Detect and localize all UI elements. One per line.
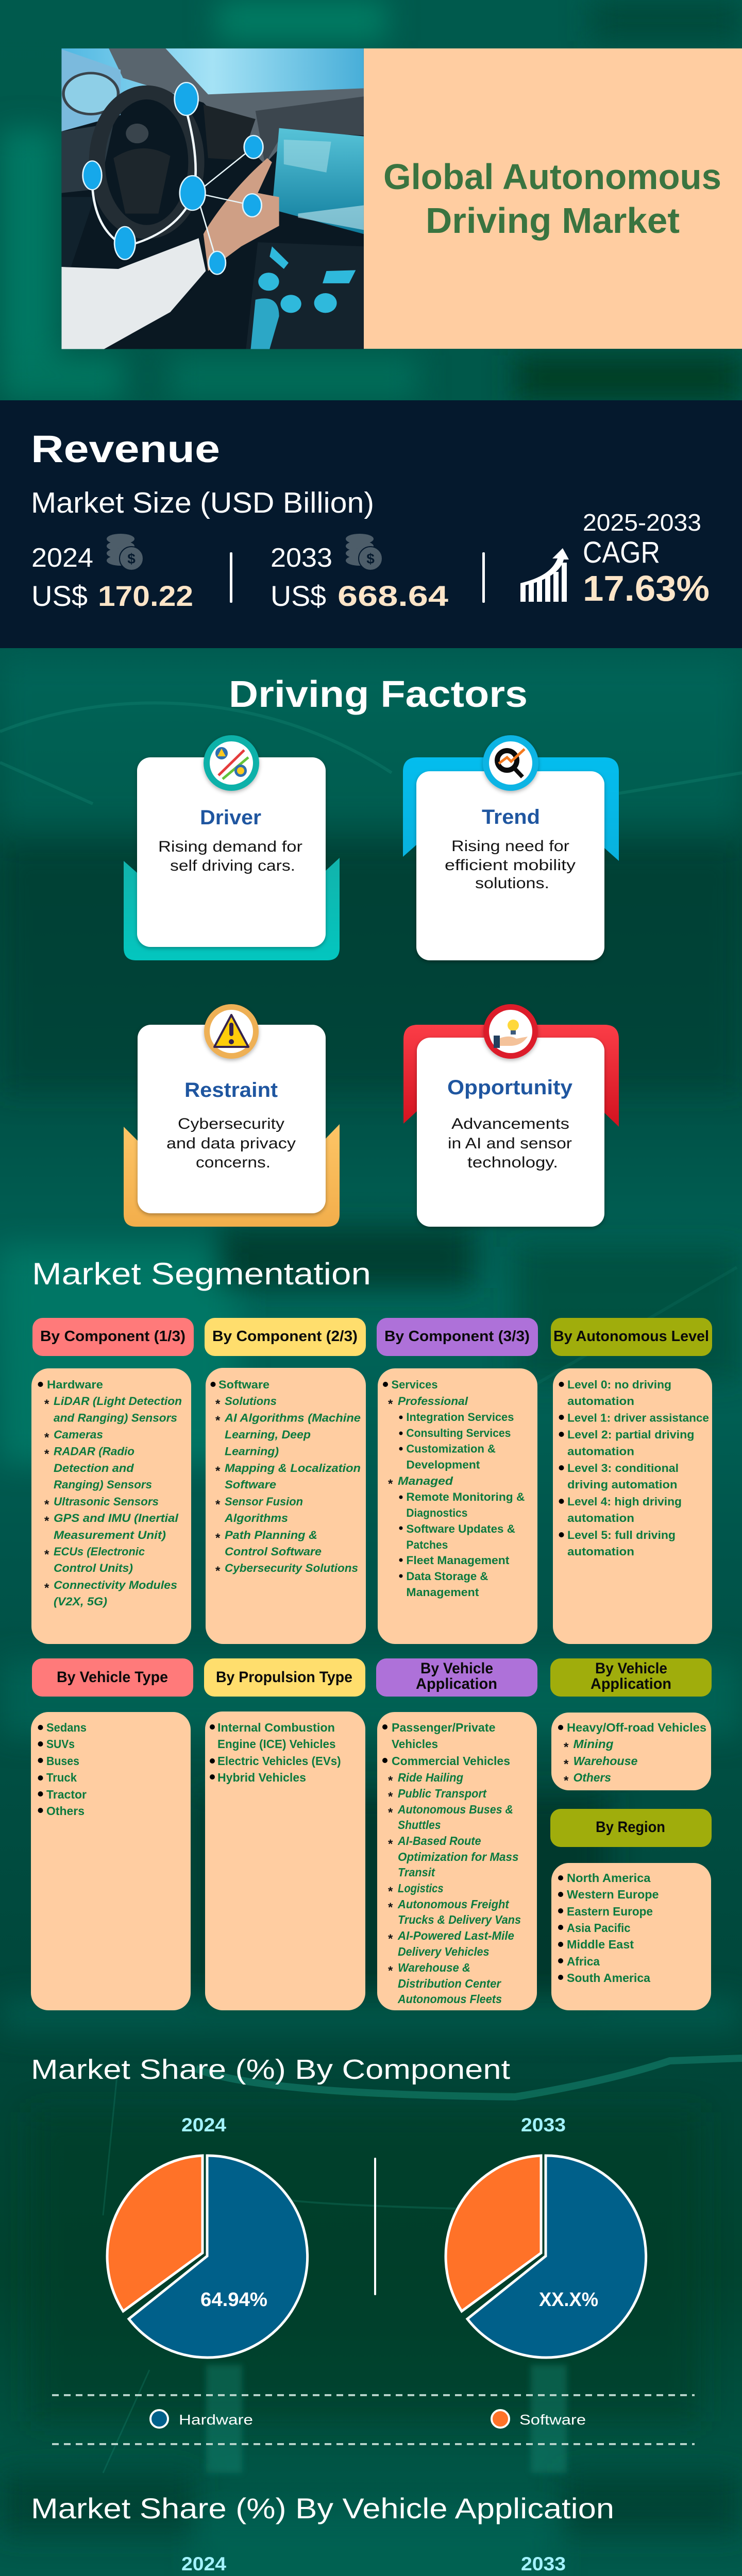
segment: by component 2: * <box>215 1498 221 1512</box>
segment: by vehicle application 1: Autonomous Buses & <box>397 1803 513 1816</box>
divider <box>374 2158 376 2295</box>
segment: by component 1: (V2X, 5G) <box>54 1595 107 1608</box>
segment: by vehicle application 1: Optimization for Mass <box>398 1850 518 1863</box>
segment: by region: Asia Pacific <box>567 1921 631 1935</box>
segment: by component 2: * <box>215 1414 221 1428</box>
segment: by vehicle type: Truck <box>46 1771 77 1784</box>
segment: by component 3: Patches <box>406 1538 448 1551</box>
segment: by component 2: Learning) <box>225 1445 279 1458</box>
segment: by vehicle application 2: Heavy/Off-road Vehicles <box>567 1721 706 1734</box>
segment: by vehicle type: By Vehicle Type <box>57 1669 168 1686</box>
segment: by vehicle application 2: Warehouse <box>573 1754 638 1768</box>
segment: by vehicle application 2: Mining <box>573 1737 613 1751</box>
stat: 2024 revenue: 170.22 <box>98 580 193 612</box>
segment: by component 1: By Component (1/3) <box>40 1328 185 1345</box>
text: driver description: Rising demand for <box>158 838 302 855</box>
segment: by component 2: Software <box>225 1478 276 1491</box>
legend: component <box>52 2395 695 2444</box>
segment: by component 1: Hardware <box>47 1378 103 1391</box>
segment: by component 1: RADAR (Radio <box>54 1445 134 1458</box>
segment: by vehicle application 1: * <box>388 1901 393 1914</box>
segment: by autonomous level: automation <box>567 1512 634 1524</box>
segment: by component 3: Integration Services <box>406 1411 514 1423</box>
text: opportunity description: technology. <box>467 1154 558 1171</box>
segment: by component 1: ECUs (Electronic <box>54 1545 145 1558</box>
segment: by propulsion type: Electric Vehicles (EVs) <box>217 1754 341 1768</box>
segment: by component 3: * <box>388 1397 393 1411</box>
segment: by component 1: LiDAR (Light Detection <box>54 1395 182 1408</box>
segment: by vehicle application 1: AI-Powered Last-Mile <box>397 1929 514 1942</box>
segment: by region: Eastern Europe <box>567 1905 653 1918</box>
icon: driver badge <box>204 735 259 791</box>
heading: market share by component: Market Share (%) By Component <box>31 2054 510 2085</box>
segment: by component 3: Remote Monitoring & <box>406 1490 525 1503</box>
segment: by component 3: By Component (3/3) <box>384 1328 530 1345</box>
segment: by vehicle application 1: Application <box>416 1675 497 1692</box>
segment: by vehicle type: SUVs <box>46 1737 75 1751</box>
stat: 2024 revenue: US$ <box>31 580 88 612</box>
text: opportunity description <box>448 1115 572 1171</box>
panel: revenue <box>0 400 742 648</box>
segment: by vehicle application 2: * <box>564 1774 569 1788</box>
text: driver description <box>158 838 302 874</box>
segment: by region: Western Europe <box>567 1888 659 1901</box>
segment: by propulsion type <box>204 1658 365 2010</box>
segment: by autonomous level: driving automation <box>567 1478 677 1491</box>
segment: by component 3: * <box>388 1477 393 1491</box>
segment: by region: North America <box>567 1871 651 1885</box>
segment: by component 3: Software Updates & <box>406 1522 515 1535</box>
text: opportunity description: in AI and sensor <box>448 1135 572 1152</box>
text: driver description: self driving cars. <box>170 857 295 874</box>
segment: by autonomous level: Level 1: driver assistance <box>567 1412 709 1424</box>
stat: CAGR: 17.63% <box>583 568 710 608</box>
segment: by component 3: Managed <box>398 1475 453 1487</box>
segment: by component 1: Control Units) <box>54 1562 133 1574</box>
segment: by component 3: Diagnostics <box>406 1506 467 1519</box>
segment: by component 1 <box>31 1318 194 1644</box>
segment: by autonomous level <box>551 1318 712 1644</box>
legend: component: Software <box>519 2412 586 2428</box>
segment: by component 1: Connectivity Modules <box>54 1579 177 1591</box>
stat: CAGR: 2025-2033 <box>583 509 701 536</box>
segment: by vehicle application 1: AI-Based Route <box>397 1834 481 1848</box>
segment: by component 2: Control Software <box>225 1545 322 1558</box>
divider <box>482 552 485 603</box>
segment: by component 3: Management <box>406 1586 479 1599</box>
stat: CAGR: CAGR <box>583 536 660 569</box>
segment: by vehicle application 1: Passenger/Private <box>392 1721 496 1734</box>
segment: by vehicle type: Sedans <box>46 1721 87 1734</box>
segment: by component 1: and Ranging) Sensors <box>54 1412 177 1424</box>
segment: by component 2 <box>205 1318 366 1644</box>
stat: 2024 revenue: 2024 <box>31 543 93 573</box>
segment: by vehicle application 2: Others <box>573 1771 611 1784</box>
segment: by component 3: Fleet Management <box>406 1554 510 1567</box>
icon: warning badge <box>204 1004 259 1059</box>
legend: component: Hardware <box>179 2412 253 2428</box>
segment: by component 2: Software <box>218 1378 269 1391</box>
chart: vehicle application pie 2033: 2033 <box>521 2553 566 2574</box>
subheading: market size: Market Size (USD Billion) <box>31 486 374 519</box>
segment: by autonomous level: Level 5: full driving <box>567 1529 676 1541</box>
segment: by component 2: By Component (2/3) <box>212 1328 358 1345</box>
card: driver <box>124 735 340 960</box>
icon: coins 2033 <box>346 534 382 570</box>
text: opportunity description: Advancements <box>451 1115 569 1132</box>
segment: by component 1: * <box>44 1447 49 1461</box>
segment: by propulsion type: Engine (ICE) Vehicles <box>217 1737 336 1751</box>
chart: vehicle application pie 2024: 2024 <box>181 2553 226 2574</box>
card: trend: Trend <box>482 806 540 828</box>
segment: by vehicle application 2: By Vehicle <box>595 1660 667 1677</box>
segment: by region: Africa <box>567 1955 600 1968</box>
segment: by autonomous level: automation <box>567 1545 634 1558</box>
segment: by vehicle application 1: * <box>388 1964 393 1978</box>
text: restraint description: Cybersecurity <box>178 1115 284 1132</box>
segment: by propulsion type: By Propulsion Type <box>216 1669 352 1686</box>
segment: by component 1: Ranging) Sensors <box>54 1478 152 1491</box>
segment: by autonomous level: Level 0: no driving <box>567 1378 671 1391</box>
chart: component pie 2033: XX.X% <box>539 2289 598 2311</box>
segment: by vehicle type: Others <box>46 1804 85 1818</box>
chart: component pie 2033: 2033 <box>521 2114 566 2136</box>
heading: driving factors: Driving Factors <box>229 674 528 715</box>
panel: hero banner <box>61 48 742 349</box>
segment: by vehicle application 1: * <box>388 1774 393 1788</box>
chart: component pie 2033 <box>446 2114 646 2358</box>
segment: by component 2: Sensor Fusion <box>225 1495 303 1508</box>
segment: by autonomous level: automation <box>567 1445 634 1458</box>
segment: by component 3: Customization & <box>406 1443 496 1455</box>
heading: market share by vehicle application: Market Share (%) By Vehicle Application <box>31 2492 614 2524</box>
chart: component pie 2024: 2024 <box>181 2114 226 2136</box>
segment: by vehicle application 1: Ride Hailing <box>398 1771 463 1784</box>
segment: by component 1: Detection and <box>54 1462 134 1475</box>
segment: by component 2: * <box>215 1464 221 1478</box>
segment: by vehicle application 1: Delivery Vehicles <box>398 1945 490 1958</box>
segment: by component 1: Measurement Unit) <box>54 1529 166 1541</box>
segment: by vehicle application 1: Shuttles <box>398 1818 441 1832</box>
segment: by component 2: Path Planning & <box>225 1529 317 1541</box>
heading: revenue: Revenue <box>31 428 220 470</box>
card: opportunity: Opportunity <box>447 1076 573 1099</box>
stat: 2033 revenue: 2033 <box>271 543 332 573</box>
title: Driving Market <box>426 200 680 241</box>
segment: by component 1: GPS and IMU (Inertial <box>54 1512 179 1524</box>
segment: by component 2: * <box>215 1564 221 1578</box>
segment: by vehicle application 1: Autonomous Freight <box>397 1897 510 1911</box>
segment: by component 1: * <box>44 1397 49 1411</box>
segment: by autonomous level: automation <box>567 1395 634 1408</box>
stat: 2024 revenue <box>31 543 193 612</box>
segment: by vehicle application 1 <box>376 1658 537 2010</box>
segment: by region <box>550 1809 712 2010</box>
text: trend description: solutions. <box>475 875 549 892</box>
stat: 2033 revenue: 668.64 <box>338 580 448 612</box>
segment: by component 2: Solutions <box>225 1395 277 1408</box>
segment: by propulsion type: Internal Combustion <box>217 1721 335 1734</box>
icon: coins 2024 <box>107 534 143 570</box>
segment: by vehicle type: Tractor <box>46 1788 87 1801</box>
heading: market segmentation: Market Segmentation <box>32 1257 371 1291</box>
segment: by vehicle application 1: Autonomous Fleets <box>397 1992 502 2006</box>
text: restraint description: concerns. <box>196 1154 271 1171</box>
segment: by vehicle application 1: * <box>388 1806 393 1820</box>
text: trend description: efficient mobility <box>445 857 576 874</box>
card: trend <box>403 735 619 960</box>
segment: by component 1: Cameras <box>54 1428 103 1441</box>
segment: by region: Middle East <box>567 1938 634 1951</box>
segment: by component 3: Consulting Services <box>406 1427 511 1439</box>
segment: by component 1: * <box>44 1514 49 1528</box>
segment: by vehicle application 1: * <box>388 1837 393 1851</box>
segment: by autonomous level: By Autonomous Level <box>553 1328 709 1345</box>
icon: trend badge <box>483 735 538 791</box>
segment: by component 2: Mapping & Localization <box>225 1462 361 1475</box>
segment: by component 2: AI Algorithms (Machine <box>224 1412 361 1424</box>
segment: by vehicle application 1: Vehicles <box>392 1737 438 1751</box>
segment: by vehicle application 1: Commercial Vehicles <box>392 1754 510 1768</box>
segment: by vehicle application 1: By Vehicle <box>420 1660 493 1677</box>
segment: by vehicle type: Buses <box>46 1754 79 1768</box>
chart: component pie 2024: 64.94% <box>200 2289 267 2311</box>
text: restraint description: and data privacy <box>166 1135 296 1152</box>
segment: by component 3: Development <box>406 1458 480 1471</box>
segment: by vehicle application 1: Warehouse & <box>398 1961 470 1974</box>
card: opportunity <box>403 1004 619 1227</box>
segment: by component 3: Data Storage & <box>406 1570 488 1583</box>
segment: by vehicle application 1: * <box>388 1885 393 1899</box>
segment: by autonomous level: Level 3: conditional <box>567 1462 679 1475</box>
card: restraint <box>124 1004 340 1227</box>
segment: by component 2: Learning, Deep <box>225 1428 311 1441</box>
segment: by autonomous level: Level 4: high driving <box>567 1495 682 1508</box>
segment: by component 1: * <box>44 1431 49 1445</box>
segment: by vehicle application 2: * <box>564 1757 569 1771</box>
segment: by vehicle application 1: Public Transport <box>398 1787 487 1800</box>
segment: by region: South America <box>567 1971 650 1985</box>
segment: by component 3: Professional <box>398 1395 468 1408</box>
card: restraint: Restraint <box>184 1079 278 1101</box>
segment: by component 2: * <box>215 1397 221 1411</box>
segment: by component 1: * <box>44 1548 49 1562</box>
text: trend description <box>445 838 576 892</box>
segment: by component 3: Services <box>392 1378 438 1391</box>
segment: by vehicle application 1: Logistics <box>398 1882 444 1895</box>
segment: by autonomous level: Level 2: partial driving <box>567 1428 695 1441</box>
segment: by vehicle application 1: * <box>388 1932 393 1946</box>
icon: growth chart with arrow <box>520 548 569 602</box>
segment: by component 2: Algorithms <box>224 1512 288 1524</box>
segment: by component 1: Ultrasonic Sensors <box>54 1495 159 1508</box>
segment: by vehicle application 2: * <box>564 1740 569 1754</box>
title <box>383 157 721 241</box>
segment: by component 2: Cybersecurity Solutions <box>225 1562 358 1574</box>
segment: by region: By Region <box>596 1819 665 1836</box>
segment: by vehicle application 1: Trucks & Delivery Vans <box>398 1913 521 1926</box>
segment: by vehicle application 2: Application <box>591 1675 671 1692</box>
segment: by vehicle application 1: * <box>388 1790 393 1804</box>
stat: 2033 revenue: US$ <box>271 580 326 612</box>
segment: by component 1: * <box>44 1581 49 1595</box>
stat: 2033 revenue <box>271 543 448 612</box>
segment: by component 1: * <box>44 1498 49 1512</box>
icon: coins 2033: $ <box>366 551 375 567</box>
segment: by vehicle application 2 <box>550 1658 712 1790</box>
text: trend description: Rising need for <box>451 838 569 855</box>
card: driver: Driver <box>200 806 261 829</box>
segment: by component 2: * <box>215 1531 221 1545</box>
icon: idea badge <box>483 1004 538 1059</box>
text: restraint description <box>166 1115 296 1171</box>
chart: component pie 2024 <box>107 2114 308 2358</box>
divider <box>230 552 232 603</box>
title: Global Autonomous <box>383 157 721 197</box>
stat: CAGR <box>583 509 710 608</box>
segment: by vehicle type <box>31 1658 193 2010</box>
title panel <box>364 48 742 349</box>
hero photo: driver touching car dashboard screen <box>61 48 364 349</box>
segment: by propulsion type: Hybrid Vehicles <box>217 1771 306 1784</box>
segment: by vehicle application 1: Transit <box>398 1866 435 1879</box>
segment: by vehicle application 1: Distribution Center <box>398 1977 501 1990</box>
icon: coins 2024: $ <box>127 551 136 567</box>
segment: by component 3 <box>377 1318 538 1644</box>
